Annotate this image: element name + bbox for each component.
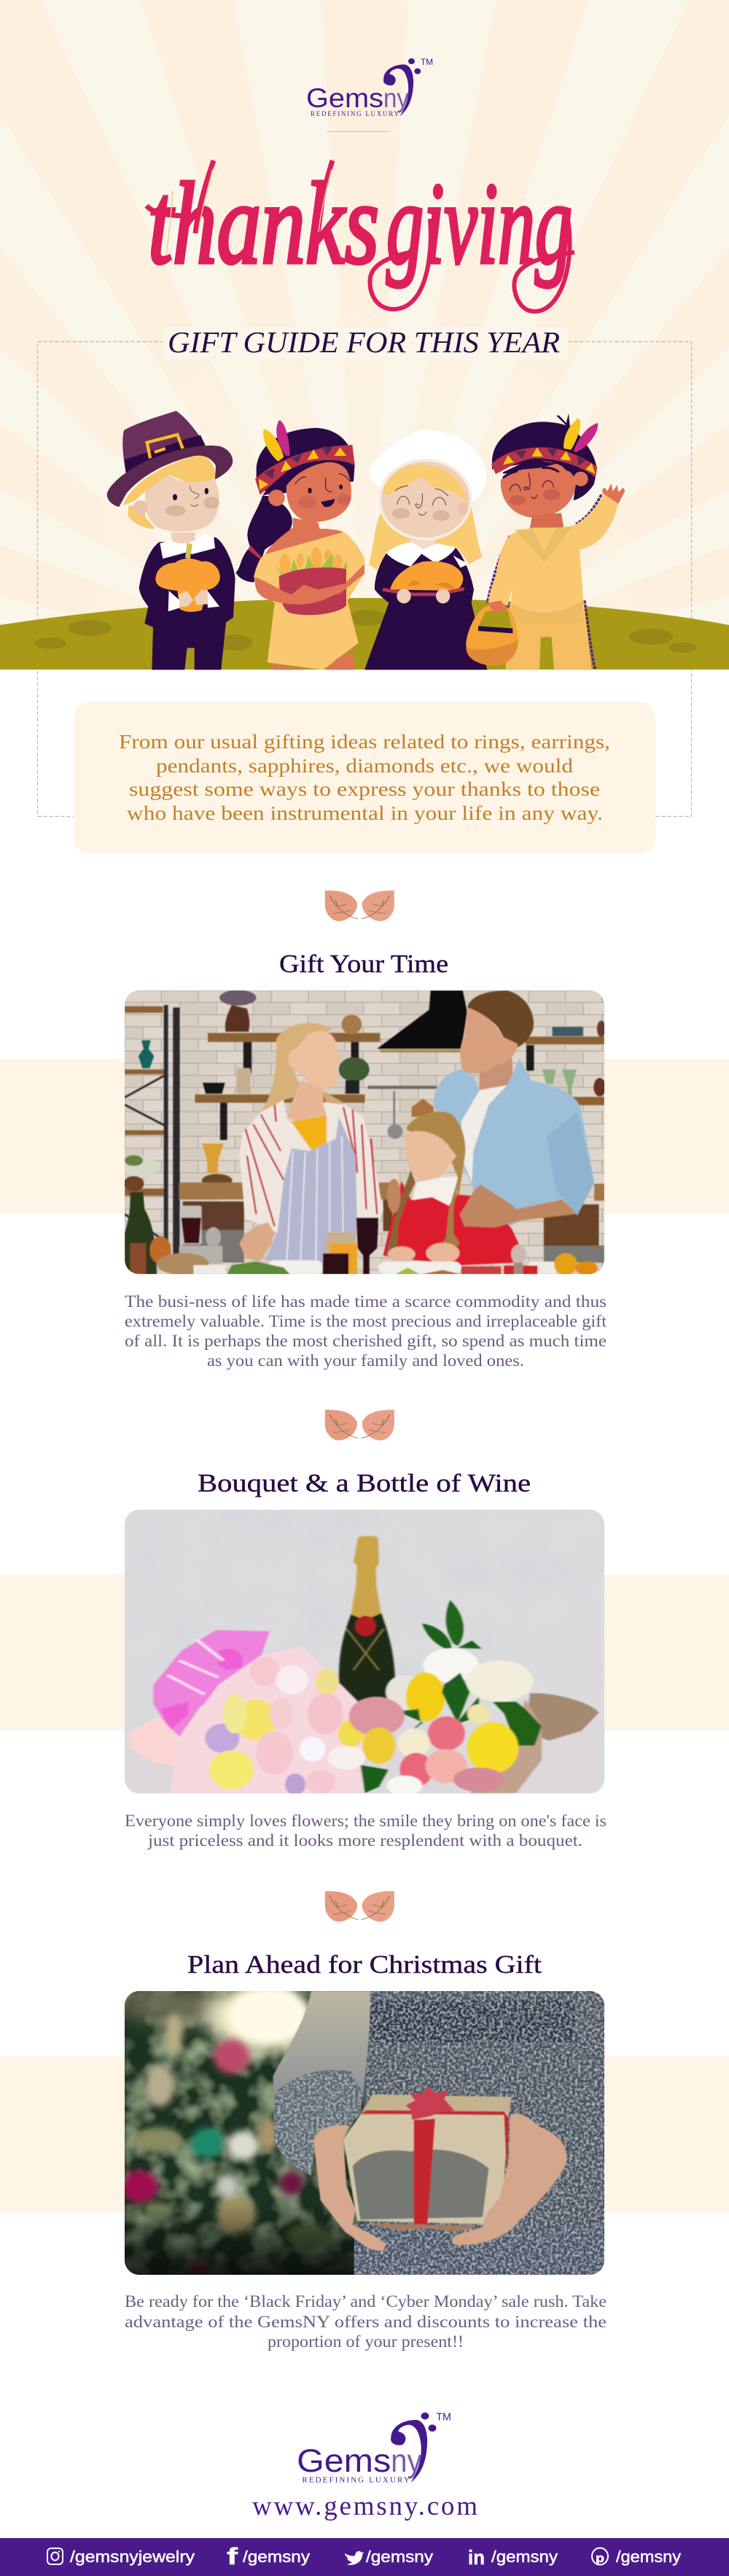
intro panel: suggest some ways to express your thanks to those [129, 778, 600, 800]
footer logo: TM [436, 2412, 451, 2424]
heading: gift your time: Gift Your Time [279, 950, 448, 978]
footer logo: Gems [297, 2442, 391, 2479]
band 2 [0, 1575, 729, 1730]
native girl [235, 420, 364, 670]
intro panel [74, 702, 655, 854]
dashed frame [38, 341, 691, 817]
title: thanks giving: thanks [148, 158, 379, 288]
linkedin: /gemsny [491, 2548, 558, 2566]
hill [0, 598, 729, 670]
body text 3: Be ready for the ‘Black Friday’ and ‘Cyber Monday’ sale rush. Take [125, 2292, 607, 2311]
pinterest: p [596, 2551, 604, 2565]
twitter: /gemsny [366, 2548, 433, 2566]
title: thanks giving: giving [386, 158, 572, 288]
sunburst background [0, 0, 729, 670]
characters: pilgrim girl and native boy [364, 414, 625, 670]
facebook [227, 2543, 310, 2569]
facebook: f [227, 2543, 238, 2569]
icon: leaves 3 [325, 1891, 394, 1922]
subtitle: gift guide for this year: GIFT GUIDE FOR THIS YEAR [168, 325, 560, 359]
body text 3 [125, 2292, 607, 2351]
body text 3: proportion of your present!! [268, 2332, 464, 2351]
icon: leaves 2 [325, 1410, 394, 1440]
photo: christmas gift [119, 1984, 604, 2276]
twitter [345, 2548, 433, 2566]
body text 1: extremely valuable. Time is the most precious and irreplaceable gift [125, 1312, 607, 1330]
body text 1: as you can with your family and loved ones. [207, 1351, 524, 1370]
body text 2: just priceless and it looks more resplendent with a bouquet. [147, 1831, 582, 1850]
photo: bouquet and wine [125, 1510, 604, 1796]
footer logo: REDEFINING LUXURY [302, 2475, 410, 2484]
website url: www.gemsny.com [252, 2491, 477, 2521]
footer logo: ny [391, 2442, 422, 2479]
instagram: /gemsnyjewelry [70, 2548, 195, 2566]
pinterest [592, 2548, 681, 2566]
top logo: Gems [306, 83, 383, 113]
pilgrim boy [107, 411, 235, 670]
footer logo [297, 2412, 451, 2484]
title: thanks giving [147, 158, 574, 311]
intro panel: pendants, sapphires, diamonds etc., we would [156, 755, 574, 777]
linkedin: in [468, 2546, 485, 2569]
body text 1: The busi-ness of life has made time a scarce commodity and thus [125, 1292, 607, 1311]
intro panel: From our usual gifting ideas related to rings, earrings, [119, 731, 610, 753]
top logo [306, 57, 433, 117]
heading: christmas: Plan Ahead for Christmas Gift [187, 1950, 542, 1979]
top logo: ny [383, 83, 409, 113]
icon: leaves 1 [325, 891, 394, 921]
facebook: /gemsny [243, 2548, 310, 2566]
linkedin [468, 2546, 558, 2569]
top logo: TM [421, 57, 433, 67]
body text 1 [125, 1292, 607, 1370]
body text 2 [125, 1812, 607, 1850]
heading: bouquet: Bouquet & a Bottle of Wine [198, 1469, 531, 1497]
body text 1: of all. It is perhaps the most cherished gift, so spend as much time [125, 1332, 607, 1350]
body text 2: Everyone simply loves flowers; the smile they bring on one's face is [125, 1812, 607, 1830]
intro panel: who have been instrumental in your life in any way. [127, 802, 603, 824]
top logo: REDEFINING LUXURY [311, 110, 399, 117]
native boy [466, 414, 625, 670]
photo: family in kitchen [122, 990, 606, 1275]
band 3 [0, 2057, 729, 2212]
characters: pilgrim boy and native girl [107, 411, 364, 670]
social bar [0, 2538, 729, 2576]
pilgrim girl [364, 430, 487, 670]
band 1 [0, 1059, 729, 1214]
pinterest: /gemsny [616, 2548, 681, 2566]
body text 3: advantage of the GemsNY offers and discounts to increase the [125, 2313, 607, 2331]
